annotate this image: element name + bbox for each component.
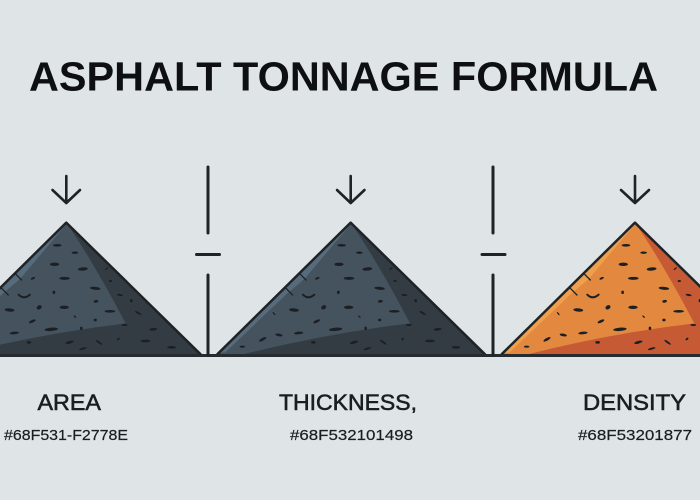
- code: area: #68F531-F2778E: [4, 427, 128, 444]
- title: ASPHALT TONNAGE FORMULA: [29, 54, 658, 100]
- divider symbol 2: [482, 167, 505, 355]
- code: thickness: #68F532101498: [290, 427, 413, 444]
- baseline: [0, 354, 700, 357]
- arrow: density: [621, 176, 649, 203]
- code: density: #68F53201877: [578, 427, 692, 444]
- arrow: thickness: [337, 176, 364, 203]
- pile: thickness (dark asphalt): [217, 223, 485, 354]
- divider symbol 1: [196, 167, 220, 355]
- label: area: AREA: [38, 390, 101, 415]
- arrow: area: [52, 176, 80, 203]
- pile: density (orange aggregate): [502, 223, 700, 354]
- label: density: DENSITY: [583, 390, 686, 415]
- pile: area (dark asphalt): [0, 223, 201, 354]
- label: thickness: THICKNESS,: [279, 390, 417, 415]
